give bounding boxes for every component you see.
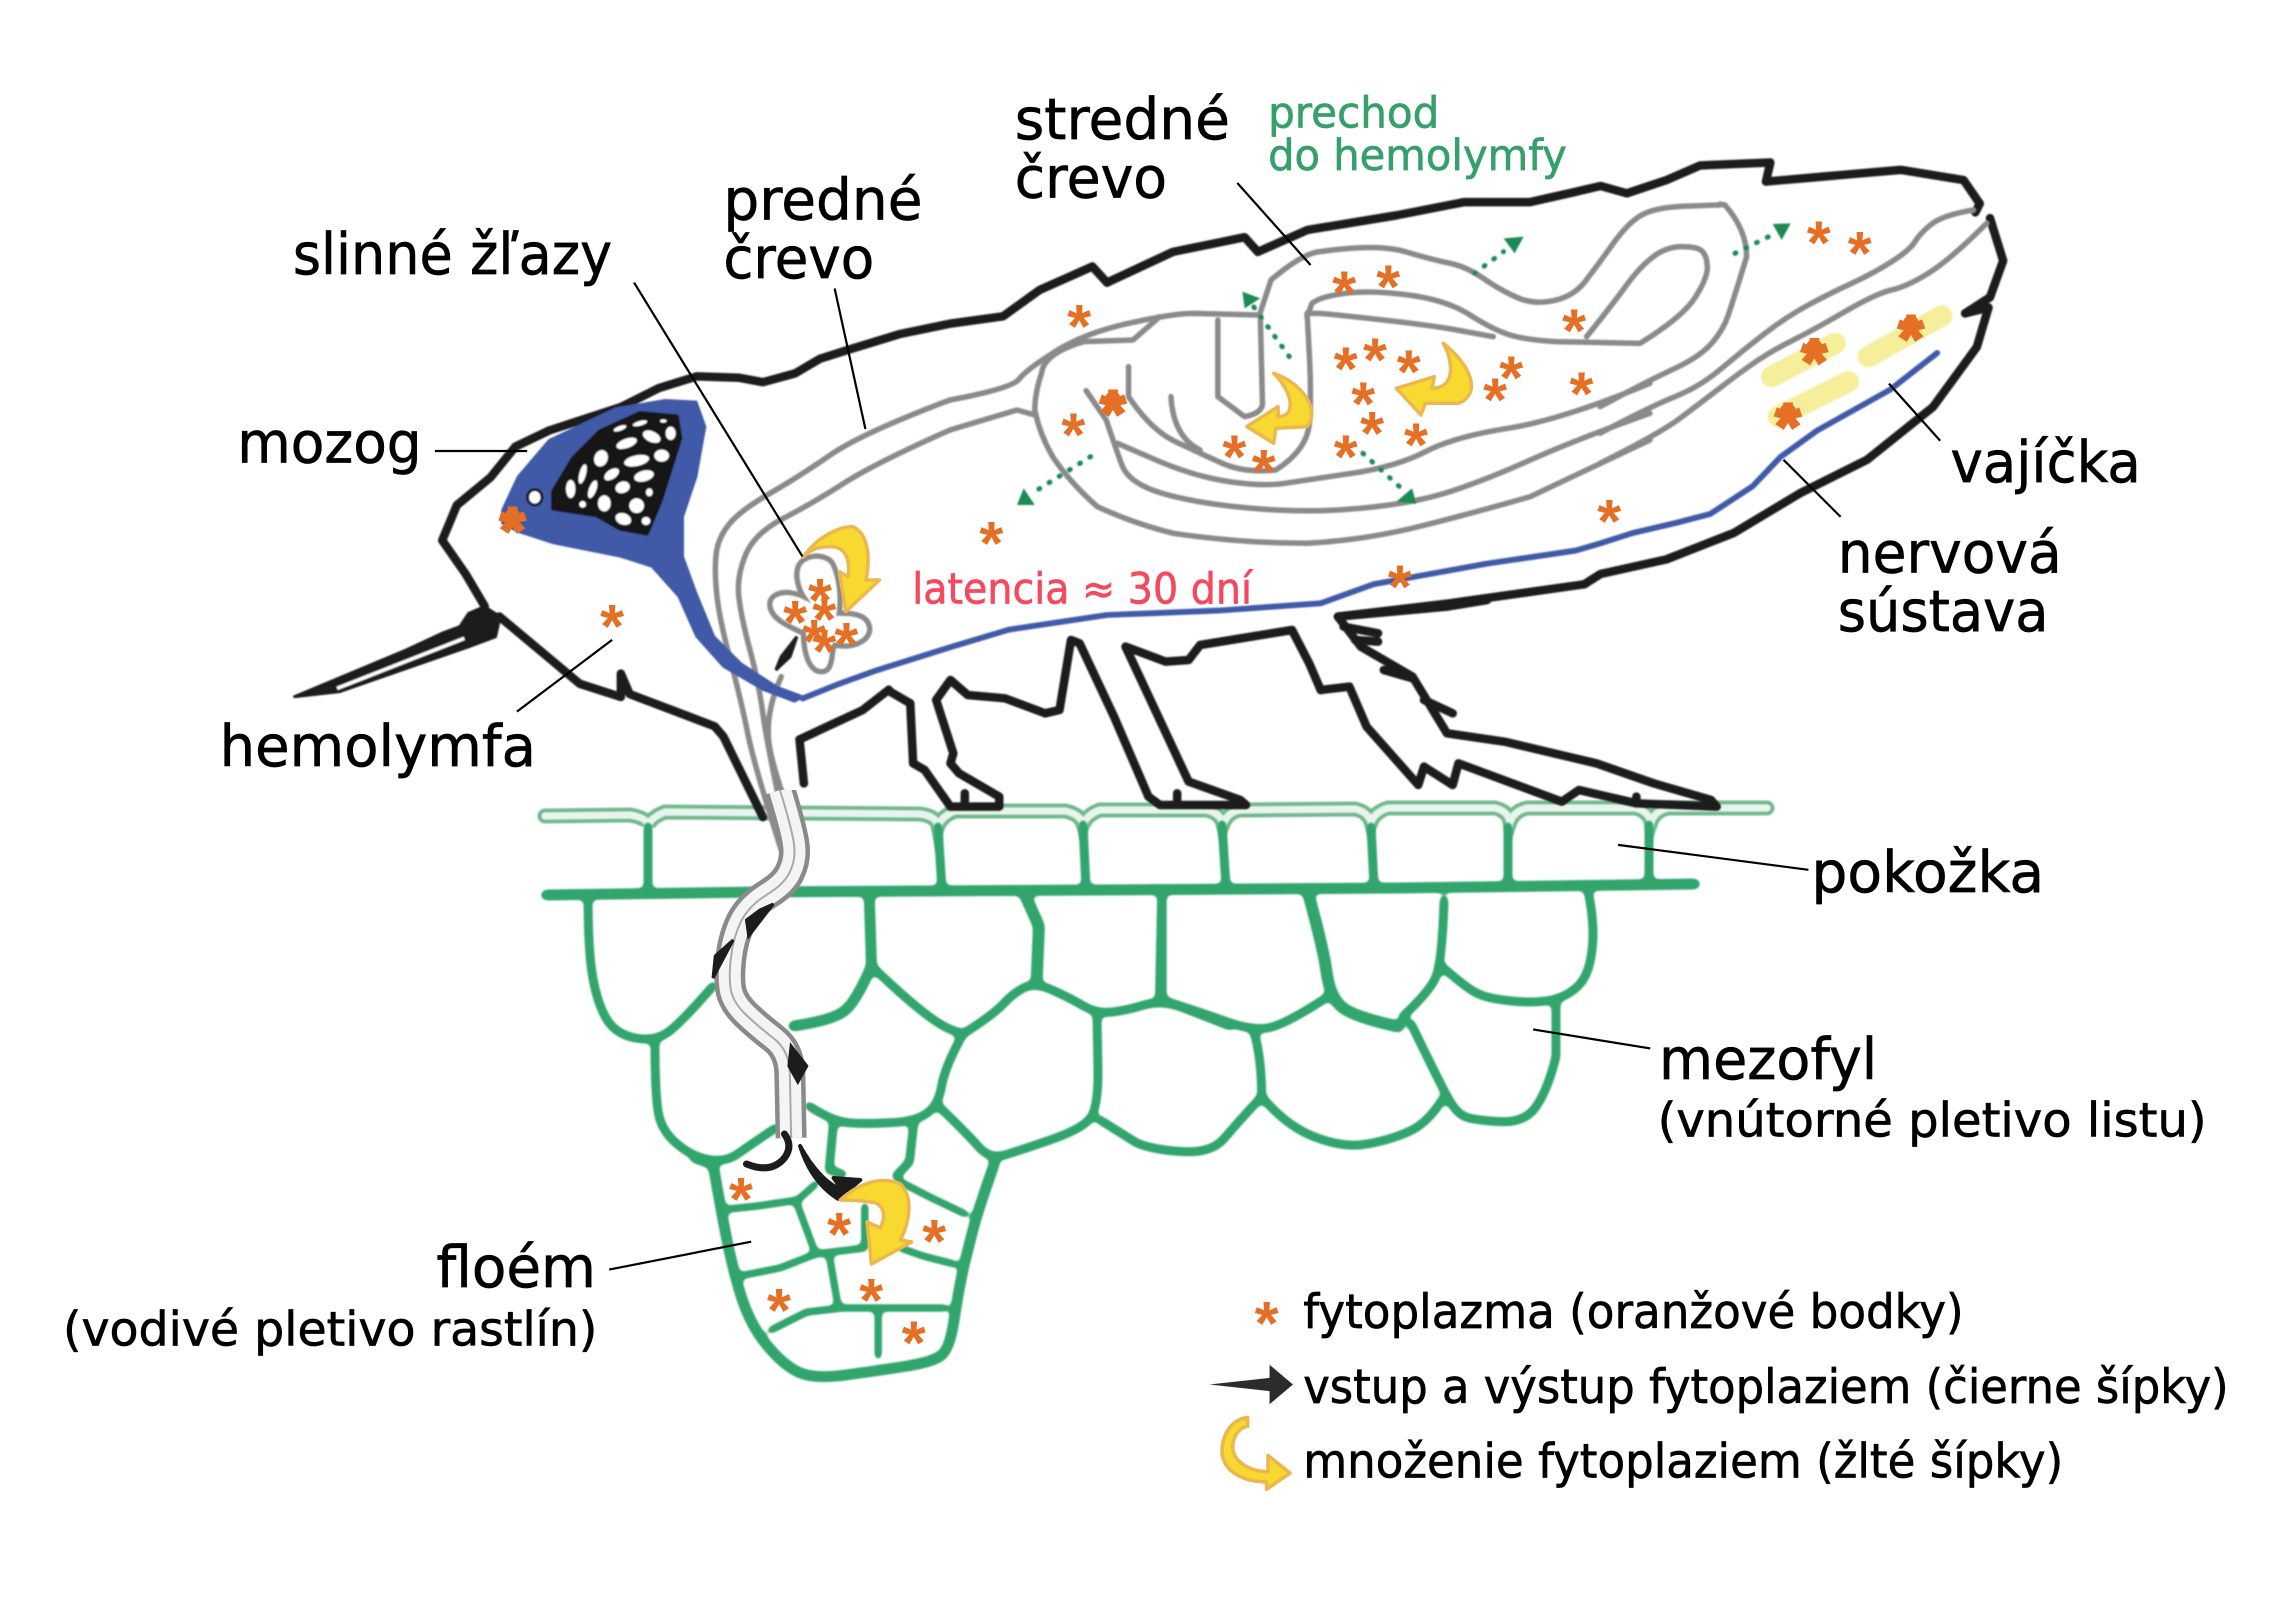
phytoplasma asterisks: head: *: [500, 494, 525, 566]
epidermis layer: [545, 808, 1767, 826]
epidermis walls: [546, 824, 1695, 895]
yellow multiplication arrow: phloem: [840, 1181, 912, 1264]
phytoplasma on eggs: ***: [1775, 302, 1923, 462]
legend item: phytoplasma: fytoplazma (oranžové bodky): [1303, 1286, 1964, 1340]
green dotted arrow in abdomen: [1735, 223, 1791, 253]
label: nervova sustava: nervová: [1838, 521, 2062, 587]
legend item: phytoplasma: [1255, 1286, 1964, 1358]
label: vnutorne pletivo listu: (vnútorné pletivo listu): [1658, 1094, 2207, 1148]
label: prechod do hemolymfy: do hemolymfy: [1268, 132, 1567, 181]
label: floem: floém: [436, 1235, 596, 1301]
legend item: yellow arrow: [1222, 1417, 2063, 1489]
green dotted arrows: transfer to hemolymph: [1017, 237, 1524, 505]
legend: [1210, 1286, 2229, 1489]
nerve cord line: [802, 353, 1937, 698]
legend item: black arrow: vstup a výstup fytoplaziem (čierne šípky): [1303, 1361, 2229, 1415]
label: latencia: latencia ≈ 30 dní: [912, 565, 1253, 614]
label: prechod do hemolymfy: prechod: [1268, 89, 1439, 138]
phytoplasma asterisks: body cavity and gut: *: [1100, 377, 1125, 449]
label: nervova sustava: sústava: [1838, 579, 2049, 645]
phytoplasma asterisks: phloem: ******: [729, 1165, 946, 1377]
label: stredne crevo: stredné: [1015, 87, 1230, 153]
legs: [890, 600, 1717, 807]
label: mozog: mozog: [237, 411, 422, 477]
yellow multiplication arrows: midgut: [1247, 343, 1471, 443]
foregut and stylet gray tubes: [715, 400, 950, 850]
label: predne crevo: predné: [723, 168, 923, 234]
body outline: head and back: [442, 163, 2003, 817]
label: pokozka: pokožka: [1811, 840, 2044, 906]
label: slinne zlazy: slinné žľazy: [293, 222, 612, 288]
legend item: yellow arrow: množenie fytoplaziem (žlté šípky): [1303, 1435, 2063, 1489]
legend item: phytoplasma: *: [1255, 1289, 1279, 1358]
insect: [295, 163, 2003, 850]
eggs: [1772, 316, 1942, 417]
leaf tissue cells: [546, 824, 1695, 1377]
leader lines: [435, 183, 1940, 1270]
phytoplasma asterisks: head: *: [600, 592, 624, 661]
brain: [502, 400, 804, 702]
label: vajicka: vajíčka: [1950, 430, 2141, 496]
label: vodive pletivo rastlin: (vodivé pletivo rastlín): [63, 1304, 597, 1358]
salivary glands: [770, 556, 870, 672]
phytoplasma asterisks: salivary gland: ******: [783, 566, 858, 686]
proboscis of the head: [295, 607, 500, 697]
stylet through the leaf: [713, 790, 860, 1199]
yellow multiplication arrow: salivary gland: [804, 527, 879, 612]
brain net: [553, 413, 680, 533]
midgut and hindgut loops: [950, 313, 1650, 543]
label: stredne crevo: črevo: [1015, 146, 1167, 212]
phytoplasma asterisks: head: [500, 494, 624, 661]
phytoplasma asterisks: body cavity and gut: **********************: [979, 209, 1872, 622]
label: predne crevo: črevo: [723, 226, 874, 292]
mesophyll cells, right part: [1100, 887, 1593, 1152]
midgut coil: [1260, 205, 1720, 343]
hindgut coil and ovary tube: [1600, 204, 1987, 463]
label: mezofyl: mezofyl: [1659, 1027, 1877, 1093]
label: hemolymfa: hemolymfa: [220, 714, 536, 780]
mesophyll and phloem cells, left part: [588, 896, 1230, 1377]
